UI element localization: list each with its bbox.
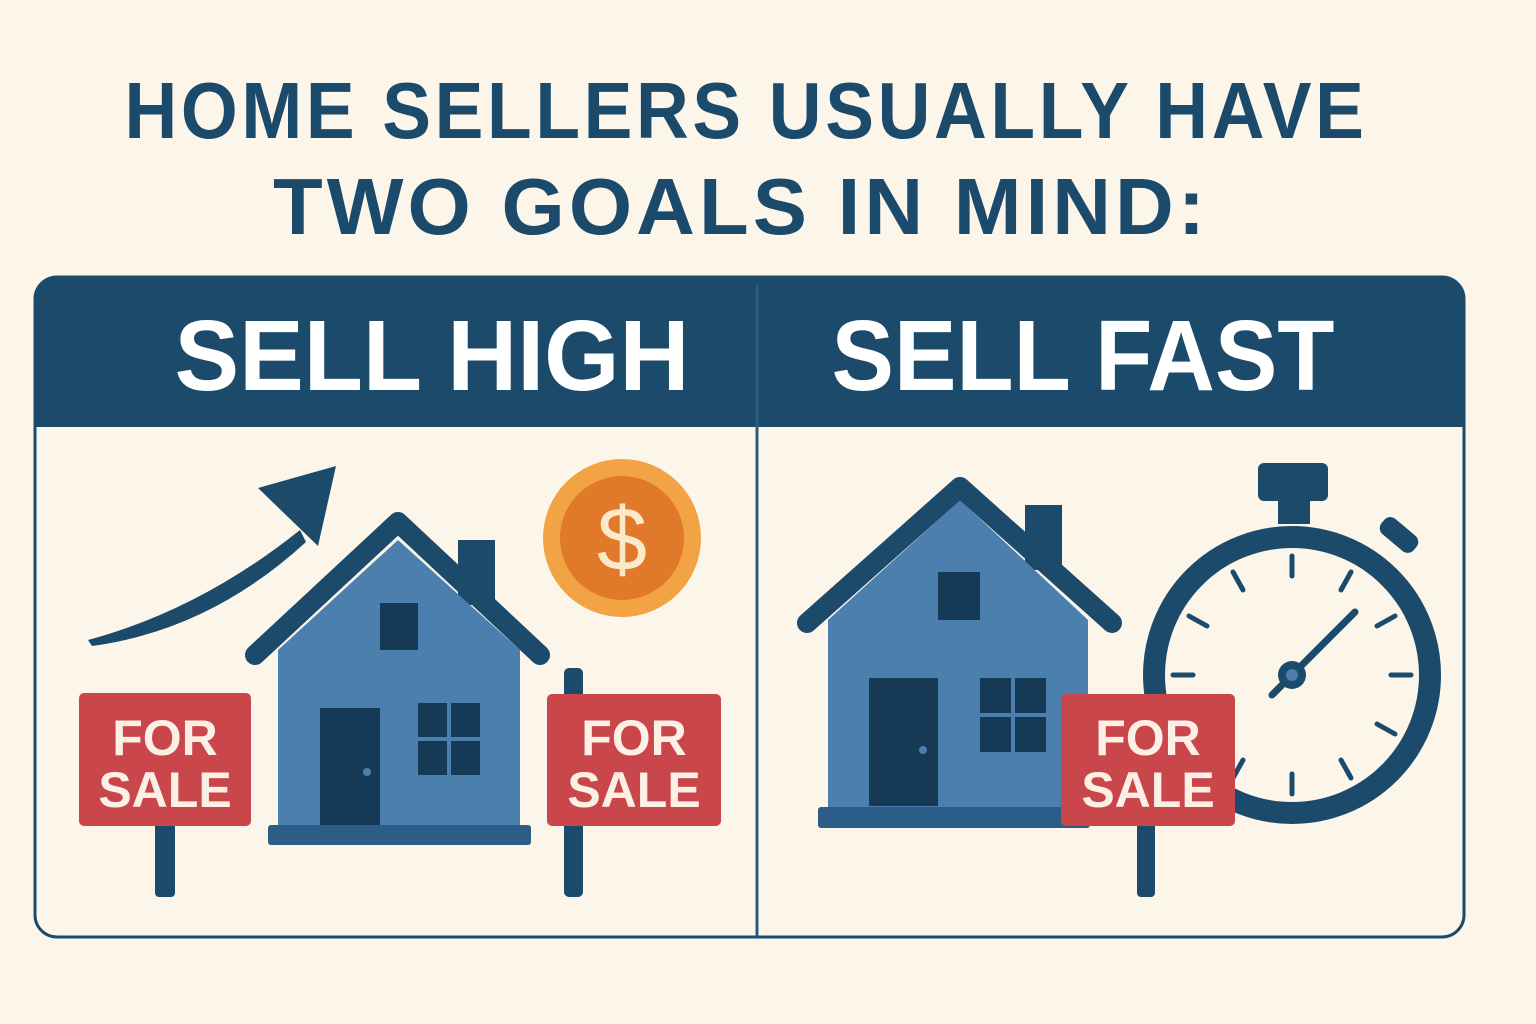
icon: for sale sign stopwatch: [1061, 694, 1235, 897]
icon: house left: [255, 522, 540, 845]
icon: for sale sign right: [547, 668, 721, 897]
icon: for sale sign right: FOR: [581, 710, 687, 766]
icon: for sale sign left: SALE: [98, 762, 232, 818]
icon: for sale sign right: SALE: [567, 762, 701, 818]
heading: sell fast: SELL FAST: [832, 300, 1334, 412]
title: [124, 66, 1368, 251]
icon: dollar coin: [543, 459, 701, 617]
panel frame: [35, 277, 1464, 937]
icon: stopwatch: [1154, 463, 1430, 813]
icon: house right: [807, 487, 1112, 828]
title: HOME SELLERS USUALLY HAVE: [124, 66, 1368, 155]
heading: sell high: SELL HIGH: [174, 300, 690, 412]
icon: rising arrow: [88, 466, 336, 646]
icon: for sale sign stopwatch: FOR: [1095, 710, 1201, 766]
icon: dollar coin: $: [597, 490, 647, 590]
title: TWO GOALS IN MIND:: [273, 162, 1209, 251]
icon: for sale sign stopwatch: SALE: [1081, 762, 1215, 818]
icon: for sale sign left: FOR: [112, 710, 218, 766]
icon: for sale sign left: [79, 693, 251, 897]
